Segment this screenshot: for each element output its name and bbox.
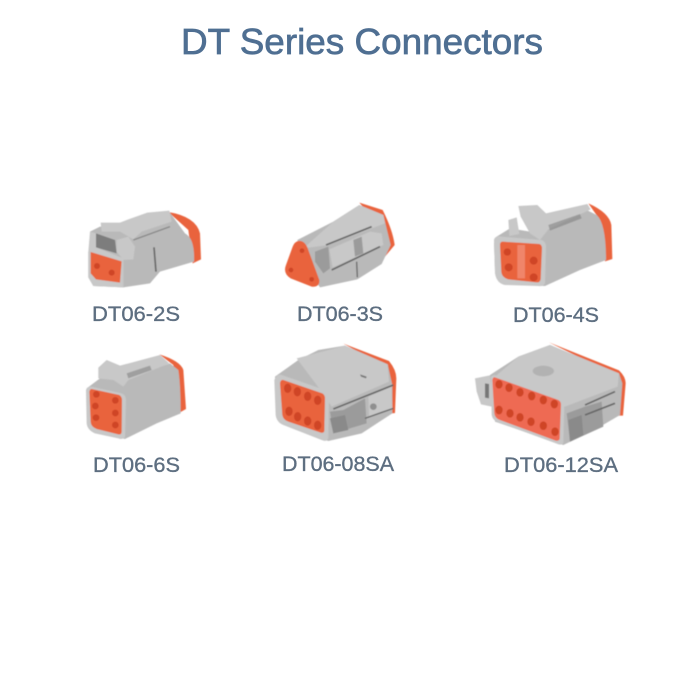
title: DT Series Connectors <box>181 21 543 62</box>
connector: DT06-2S <box>88 211 201 287</box>
connector: DT06-3S <box>285 203 395 287</box>
label: DT06-4S: DT06-4S <box>513 304 599 327</box>
label: DT06-6S: DT06-6S <box>93 454 180 477</box>
label: DT06-12SA: DT06-12SA <box>504 454 618 477</box>
connector: DT06-12SA <box>475 342 626 445</box>
connector: DT06-6S <box>86 354 186 439</box>
label: DT06-3S: DT06-3S <box>297 303 383 326</box>
connector: DT06-4S <box>494 203 612 286</box>
label: DT06-2S: DT06-2S <box>92 303 180 326</box>
connector: DT06-08SA <box>274 344 396 441</box>
label: DT06-08SA: DT06-08SA <box>282 453 394 476</box>
